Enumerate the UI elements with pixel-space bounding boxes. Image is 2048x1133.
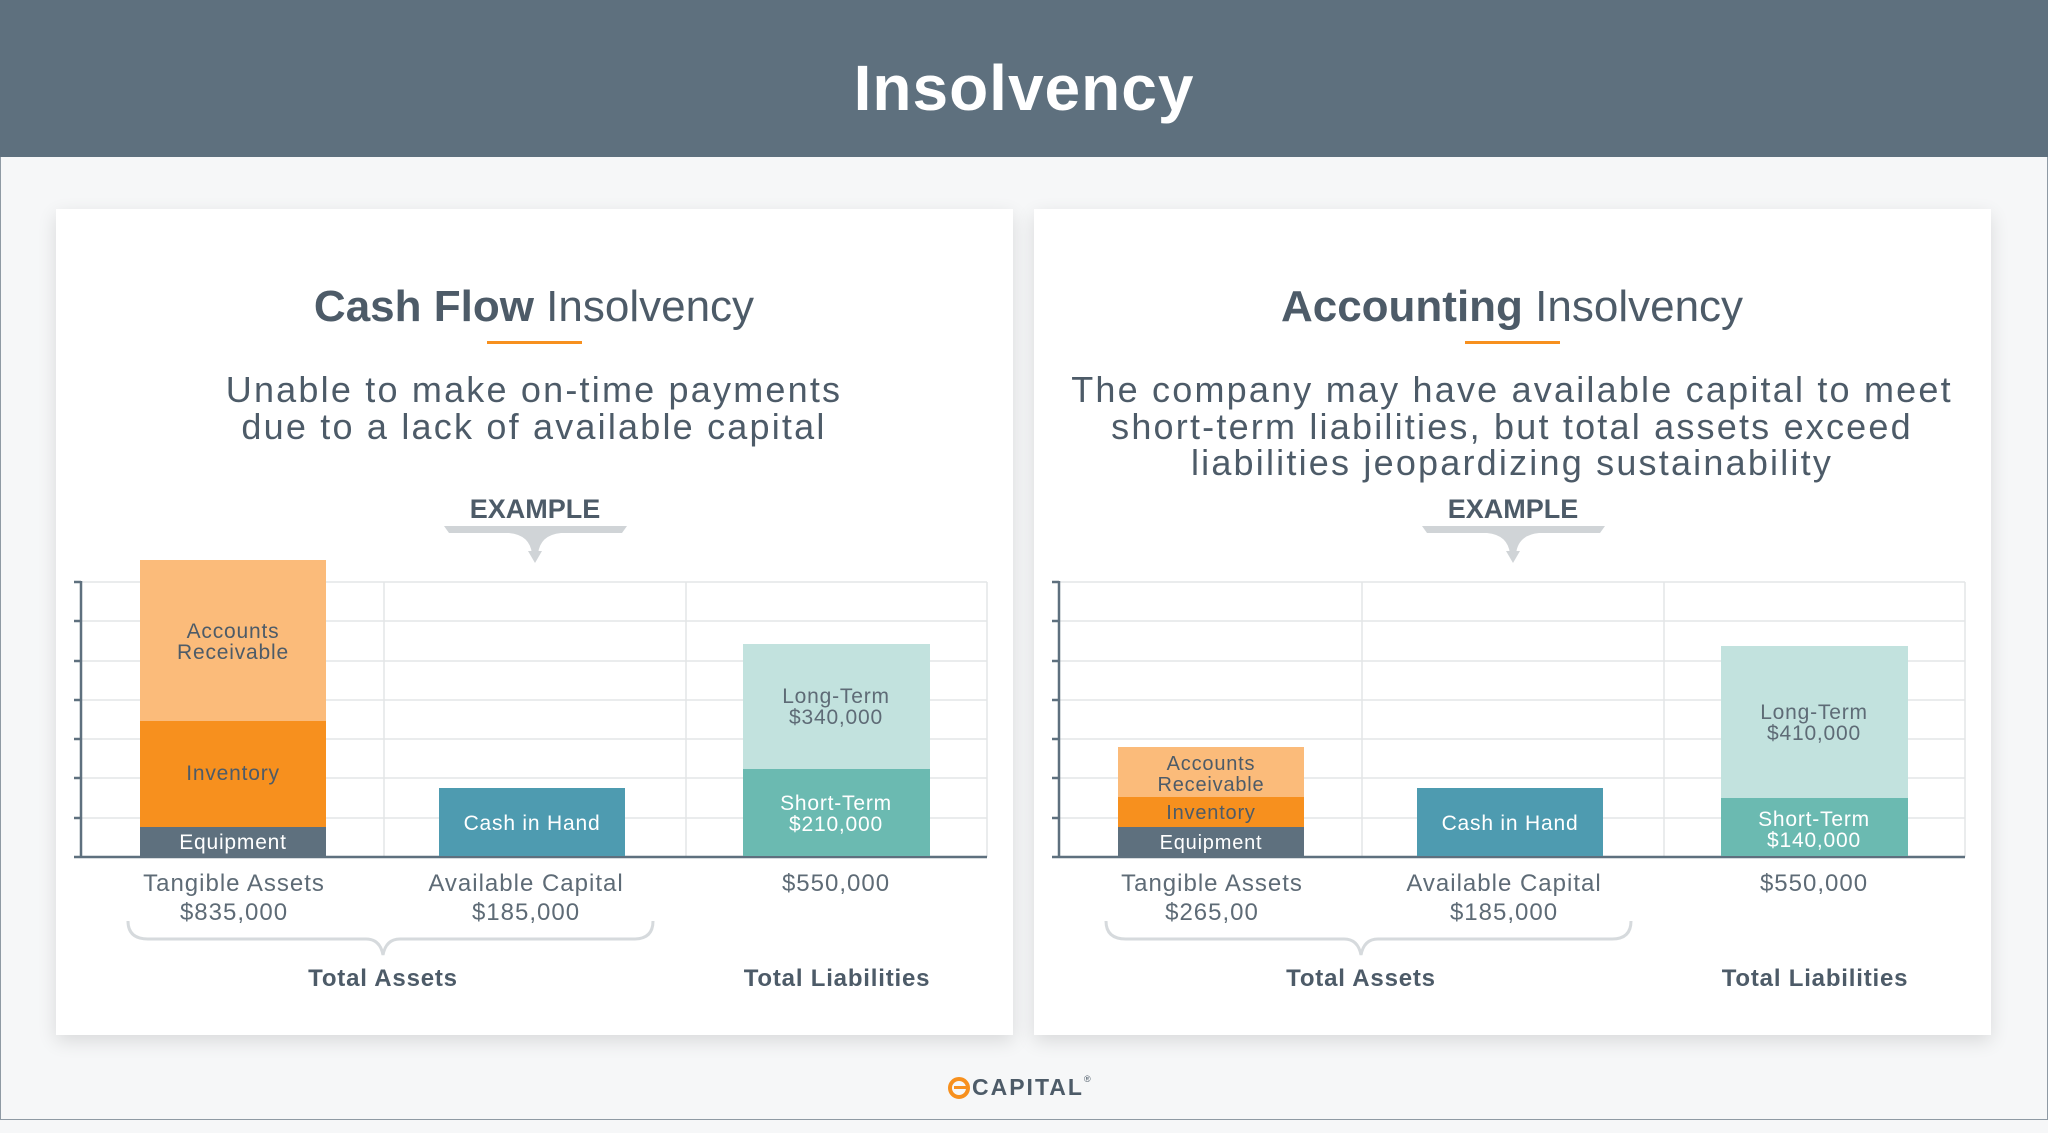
totals: Total Assets — [308, 965, 458, 992]
bar chart — [74, 560, 987, 857]
category labels: $550,000 — [782, 870, 890, 897]
category labels — [143, 870, 890, 926]
bar: liabilities: Long-Term — [1760, 701, 1868, 724]
bar: cash in hand: Cash in Hand — [1442, 812, 1578, 835]
bar: liabilities: $410,000 — [1767, 722, 1861, 745]
totals — [1286, 965, 1908, 992]
totals — [308, 965, 930, 992]
brace: total assets — [128, 921, 653, 955]
bar: tangible assets: Equipment — [179, 831, 287, 854]
bar: tangible assets — [140, 560, 326, 856]
panel: accounting insolvency — [1034, 209, 1991, 1035]
bar: liabilities: Long-Term — [782, 685, 890, 708]
bar: cash in hand — [1417, 788, 1603, 856]
header: Insolvency — [854, 52, 1194, 124]
brace: total assets — [1106, 921, 1631, 955]
category labels: Tangible Assets — [1121, 870, 1303, 897]
bar: tangible assets: Accounts — [1167, 753, 1255, 775]
bar: liabilities — [1721, 646, 1908, 856]
bar: cash in hand: Cash in Hand — [464, 812, 600, 835]
bar: tangible assets: Inventory — [186, 762, 280, 785]
category labels: $265,00 — [1165, 899, 1259, 926]
bar: liabilities: $210,000 — [789, 813, 883, 836]
category labels: Tangible Assets — [143, 870, 325, 897]
bar: tangible assets: Receivable — [177, 641, 289, 664]
totals: Total Liabilities — [744, 965, 930, 992]
heading: Accounting Insolvency — [1281, 282, 1743, 331]
header — [0, 0, 2048, 157]
example label with bracket: EXAMPLE — [470, 494, 600, 524]
bar: tangible assets: Inventory — [1166, 802, 1256, 824]
logo: eCapital: CAPITAL® — [972, 1074, 1091, 1100]
example label with bracket — [444, 494, 627, 563]
totals: Total Liabilities — [1722, 965, 1908, 992]
category labels: Available Capital — [1406, 870, 1602, 897]
description: short-term liabilities, but total assets exceed — [1111, 406, 1913, 447]
bar: tangible assets: Accounts — [187, 620, 279, 643]
panel: cash flow insolvency — [56, 209, 1013, 1035]
category labels: $185,000 — [1450, 899, 1558, 926]
description: liabilities jeopardizing sustainability — [1191, 442, 1833, 483]
bar chart — [1052, 581, 1965, 857]
category labels: Available Capital — [428, 870, 624, 897]
description: Unable to make on-time payments — [226, 369, 842, 410]
description: The company may have available capital to meet — [1071, 369, 1953, 410]
bar: liabilities — [743, 644, 930, 856]
description — [1071, 369, 1953, 483]
bar: liabilities: $340,000 — [789, 706, 883, 729]
example label with bracket: EXAMPLE — [1448, 494, 1578, 524]
description — [226, 369, 842, 447]
category labels: $185,000 — [472, 899, 580, 926]
bar: liabilities: Short-Term — [1758, 808, 1870, 831]
description: due to a lack of available capital — [241, 406, 827, 447]
category labels — [1121, 870, 1868, 926]
bar: tangible assets: Equipment — [1160, 832, 1262, 854]
bar: liabilities: $140,000 — [1767, 829, 1861, 852]
bar: tangible assets — [1118, 747, 1304, 856]
bar: liabilities: Short-Term — [780, 792, 892, 815]
example label with bracket — [1422, 494, 1605, 563]
category labels: $835,000 — [180, 899, 288, 926]
totals: Total Assets — [1286, 965, 1436, 992]
bar: cash in hand — [439, 788, 625, 856]
heading: Cash Flow Insolvency — [314, 282, 754, 331]
bar: tangible assets: Receivable — [1158, 774, 1264, 796]
category labels: $550,000 — [1760, 870, 1868, 897]
